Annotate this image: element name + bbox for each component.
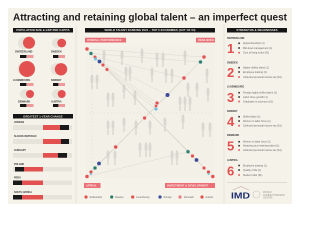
entry: Norway: NORWAY <box>227 110 238 113</box>
logo: world competitiveness center: WORLD <box>263 192 272 194</box>
entry: Switzerland: SWITZERLAND <box>227 37 245 40</box>
entry: Austria: Quality of life (1) <box>243 169 261 172</box>
bubble: Luxembourg: LUXEMBOURG <box>13 79 30 82</box>
legend: Austria <box>206 196 214 199</box>
bar: Jordan: JORDAN <box>14 121 24 124</box>
entry: Austria: 6 <box>227 164 234 178</box>
heading: strengths and weaknesses <box>227 28 287 32</box>
entry: Sweden: Collected personal income tax (61) <box>243 76 282 79</box>
entry: Denmark: 5 <box>227 138 234 154</box>
markers: light blue <box>90 58 210 175</box>
label: overall performance: OVERALL PERFORMANCE <box>87 38 122 42</box>
logo: world competitiveness center: COMPETITIVENESS <box>263 195 285 197</box>
panel: strengths and weaknesses <box>227 28 287 200</box>
panel: world talent ranking <box>84 28 215 199</box>
entry: Luxembourg: Labor force growth (1) <box>243 96 268 99</box>
silhouettes <box>91 48 211 165</box>
markers: Sweden <box>89 52 202 170</box>
legend: Sweden <box>115 196 124 199</box>
entry: Denmark: Attracting and retaining talent (1) <box>243 145 279 148</box>
label: appeal <box>84 183 100 188</box>
bar: Hungary: HUNGARY <box>14 149 26 152</box>
markers: Luxembourg <box>89 56 210 174</box>
chart: network scatter <box>85 47 215 178</box>
entry: Switzerland: 1 <box>227 41 234 56</box>
logo: IMD: IMD <box>231 190 250 200</box>
entry: Austria: AUSTRIA <box>227 159 238 162</box>
background panel <box>8 8 292 204</box>
label: investment and development: INVESTMENT & DEVELOPMENT <box>167 184 209 188</box>
heading: population size: POPULATION SIZE & GDP PER CAPITA <box>16 28 70 32</box>
label: resilience <box>196 38 215 42</box>
logo: IMD <box>231 186 250 200</box>
entry: Switzerland <box>227 37 272 56</box>
entry: Norway: Collected personal income tax (61) <box>243 125 282 128</box>
entry: Sweden: Employee training (1) <box>243 71 267 74</box>
entry: Norway: Women in labor force (1) <box>243 120 271 123</box>
label: appeal: APPEAL <box>86 184 97 188</box>
legend: Norway <box>164 196 172 199</box>
entry: Norway: Skilled labor (1) <box>243 116 261 119</box>
entry: Luxembourg <box>227 86 277 105</box>
bar: Peru: PERU <box>14 176 21 180</box>
title: Attracting and retaining global talent – an imperfect quest <box>13 12 288 24</box>
entry: Norway: 4 <box>227 114 235 129</box>
label: overall performance <box>85 38 126 42</box>
legend: Luxembourg <box>136 196 150 199</box>
bubble: Austria: AUSTRIA <box>51 100 62 103</box>
entry: Austria: Student ratio (51) <box>243 174 262 177</box>
legend: Switzerland <box>90 196 103 199</box>
entry: Denmark <box>227 134 282 154</box>
entry: Norway <box>227 110 282 129</box>
entry: Luxembourg: 3 <box>227 90 234 105</box>
markers: Norway <box>97 60 198 165</box>
entry: Denmark: Collected personal income tax (61) <box>243 149 282 152</box>
legend <box>84 195 214 199</box>
panel: greatest 1-year change <box>13 114 73 200</box>
markers: Austria <box>105 68 158 149</box>
entry: Sweden: SWEDEN <box>227 62 238 65</box>
bubble: Sweden: SWEDEN <box>51 51 62 54</box>
heading: world talent ranking <box>85 28 215 32</box>
heading: strengths and weaknesses: STRENGTHS & WEAKNESSES <box>236 28 278 32</box>
entry: Austria <box>227 159 267 178</box>
bubble: Denmark: DENMARK <box>18 100 30 103</box>
panel: population size and GDP per capita <box>13 28 73 107</box>
logo: world competitiveness center <box>253 191 285 200</box>
entry: Sweden: 2 <box>227 65 234 80</box>
bar: Poland: POLAND <box>14 163 24 166</box>
entry: Luxembourg: LUXEMBOURG <box>227 86 244 89</box>
connecting lines <box>87 49 213 176</box>
logo: world competitiveness center: CENTER <box>263 198 273 200</box>
markers: Switzerland <box>85 47 215 178</box>
entry: Denmark: Women in labor force (2) <box>243 141 271 144</box>
entry: Denmark: DENMARK <box>227 134 239 137</box>
entry: Switzerland: Apprenticeships (1) <box>243 42 265 45</box>
bubble: Switzerland: SWITZERLAND <box>15 51 33 54</box>
markers: Denmark <box>101 63 206 170</box>
entry: Austria: Employee training (1) <box>243 164 267 167</box>
heading: greatest change: GREATEST 1-YEAR CHANGE <box>23 114 63 118</box>
label: investment and development <box>165 183 215 188</box>
bar: South Africa: SOUTH AFRICA <box>14 191 32 194</box>
bar: Slovak Republic: SLOVAK REPUBLIC <box>14 135 37 138</box>
entry: Sweden: Higher-skilled talent (1) <box>243 67 269 70</box>
entry: Luxembourg: Foreign highly skilled talent (1) <box>243 92 277 95</box>
bubble: Norway: NORWAY <box>51 79 62 82</box>
entry: Switzerland: Mid-level management (1) <box>243 47 272 50</box>
heading: world talent ranking: WORLD TALENT RANKING 2021 – TOP 6 ECONOMIES (OUT OF 64) <box>104 28 196 32</box>
entry: Switzerland: Cost of living index (61) <box>243 52 269 55</box>
label: resilience: RESILIENCE <box>198 38 214 42</box>
entry: Sweden <box>227 62 282 80</box>
entry: Luxembourg: Graduates in sciences (61) <box>243 100 273 103</box>
legend: Denmark <box>184 196 195 199</box>
